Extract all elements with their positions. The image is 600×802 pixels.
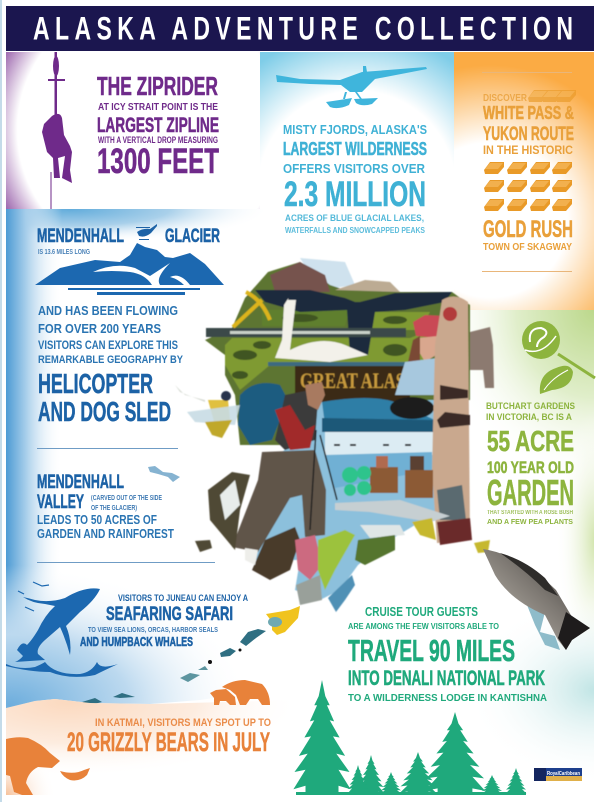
cliff — [296, 575, 322, 605]
icon: glacier mountains — [35, 243, 224, 295]
hiker — [232, 382, 337, 552]
heading: largest zipline: LARGEST ZIPLINE — [97, 114, 219, 137]
icon: yellow helicopter — [266, 606, 300, 635]
heading: valley: VALLEY — [37, 492, 84, 513]
kayaker — [175, 385, 240, 438]
icon: bear catching fish — [6, 737, 60, 795]
heading: the ziprider: THE ZIPRIDER — [97, 71, 218, 101]
blue islands — [328, 575, 355, 612]
left edge rule — [0, 0, 2, 802]
icon: whale — [6, 588, 118, 677]
text: miles long: IS 13.6 MILES LONG — [38, 249, 90, 256]
text: wilderness lodge: TO A WILDERNESS LODGE IN KANTISHNA — [348, 692, 547, 704]
text: waterfalls: WATERFALLS AND SNOWCAPPED PEAKS — [285, 226, 426, 235]
map collage of Alaska — [175, 258, 494, 612]
text: visitors explore: VISITORS CAN EXPLORE THIS — [38, 340, 178, 352]
swan — [275, 298, 368, 362]
heading: largest wilderness: LARGEST WILDERNESS — [283, 139, 427, 159]
sky patch — [300, 258, 355, 290]
sign: great alaskan — [268, 362, 413, 402]
sign: great alaskan: GREAT ALAS — [300, 368, 405, 393]
panel: misty fjords — [260, 52, 454, 235]
icon: helicopter — [136, 224, 157, 240]
coastal greenery — [355, 535, 395, 565]
eagle — [245, 527, 300, 580]
flower — [342, 466, 371, 496]
text: glacial lakes: ACRES OF BLUE GLACIAL LAKES, — [285, 213, 424, 224]
text: rose bush: THAT STARTED WITH A ROSE BUSH — [487, 510, 573, 516]
panel: seafaring safari — [6, 565, 300, 710]
dog sled row — [334, 444, 411, 446]
icon: floatplane — [276, 66, 427, 108]
forest — [225, 330, 430, 390]
forest shadows — [232, 314, 407, 379]
text: garden and rainforest: GARDEN AND RAINFOREST — [37, 527, 174, 541]
icon: salmon — [60, 768, 90, 780]
chairs — [370, 456, 433, 498]
waterfall coast — [195, 472, 250, 552]
text: butchart gardens: BUTCHART GARDENS — [486, 401, 575, 412]
heading: glacier: GLACIER — [165, 226, 220, 247]
panel: mendenhall glacier — [6, 209, 270, 709]
number: 2.3 million: 2.3 MILLION — [284, 175, 426, 214]
girl — [390, 315, 458, 419]
text: pea plants: AND A FEW PEA PLANTS — [487, 517, 573, 526]
text: 50 acres: LEADS TO 50 ACRES OF — [37, 513, 157, 527]
salmon — [483, 549, 590, 650]
text: in victoria: IN VICTORIA, BC IS A — [486, 412, 572, 423]
icon: island chain — [82, 629, 266, 705]
collage base: upper land — [205, 262, 470, 445]
rock and mountain — [270, 262, 330, 292]
text: sea lions: TO VIEW SEA LIONS, ORCAS, HARBOR SEALS — [88, 625, 218, 634]
text: in the historic: IN THE HISTORIC — [483, 143, 573, 157]
whale tail — [255, 290, 452, 355]
heading: dog sled: AND DOG SLED — [38, 396, 171, 427]
text: of the glacier: OF THE GLACIER) — [91, 505, 137, 512]
panel: butchart gardens — [434, 310, 595, 670]
text: discover: DISCOVER — [483, 93, 528, 104]
panel: denali — [293, 590, 594, 795]
icon: birds — [18, 582, 49, 611]
logo: royal caribbean: RoyalCaribbean — [547, 771, 580, 777]
train — [206, 328, 406, 337]
zipliner — [295, 535, 322, 580]
panel: katmai bears — [6, 680, 300, 795]
text: 200 years: FOR OVER 200 YEARS — [38, 321, 161, 336]
text: cruise tour guests: CRUISE TOUR GUESTS — [365, 605, 478, 619]
icon: valley lake — [148, 466, 180, 482]
text: at icy strait point: AT ICY STRAIT POINT IS THE — [98, 102, 218, 113]
collage base: lower water — [245, 400, 438, 600]
heading: 20 grizzly bears: 20 GRIZZLY BEARS IN JULY — [67, 727, 270, 757]
heading: helicopter: HELICOPTER — [38, 368, 153, 399]
text: remarkable geography: REMARKABLE GEOGRAPHY BY — [38, 354, 184, 366]
heading: seafaring safari: SEAFARING SAFARI — [106, 604, 233, 625]
number: 1300 feet: 1300 FEET — [97, 142, 219, 181]
icon: trees — [293, 680, 526, 795]
text: vertical drop: WITH A VERTICAL DROP MEASURING — [98, 135, 218, 145]
totem pole — [432, 296, 494, 545]
icon: rose — [522, 321, 595, 394]
text: in katmai: IN KATMAI, VISITORS MAY SPOT UP TO — [95, 717, 271, 729]
icon: small gold bars — [528, 90, 576, 102]
glacial scenery — [322, 398, 435, 425]
lime alaska patch — [318, 530, 355, 590]
logo: royal caribbean — [534, 768, 582, 781]
icon: gold bars — [484, 162, 572, 211]
icon: zipline rider — [42, 52, 72, 209]
heading: mendenhall: MENDENHALL — [37, 226, 124, 247]
title: ALASKA ADVENTURE COLLECTION — [33, 11, 573, 46]
text: town of skagway: TOWN OF SKAGWAY — [483, 242, 572, 253]
title bar — [6, 6, 594, 51]
heading: mendenhall valley: MENDENHALL — [37, 472, 124, 493]
text: flowing: AND HAS BEEN FLOWING — [38, 303, 178, 318]
text: juneau: VISITORS TO JUNEAU CAN ENJOY A — [118, 593, 248, 604]
panel: zipline — [6, 52, 260, 209]
text: few visitors: ARE AMONG THE FEW VISITORS ABLE TO — [348, 622, 499, 631]
ship — [335, 500, 450, 522]
heading: humpback whales: AND HUMPBACK WHALES — [80, 634, 193, 649]
text: carved out: (CARVED OUT OF THE SIDE — [91, 495, 162, 502]
text: misty fjords: MISTY FJORDS, ALASKA'S — [283, 122, 427, 137]
panel: white pass — [454, 52, 594, 310]
pickaxe — [233, 292, 270, 327]
icon: bears — [210, 680, 270, 705]
text: offers visitors: OFFERS VISITORS OVER — [283, 161, 426, 176]
